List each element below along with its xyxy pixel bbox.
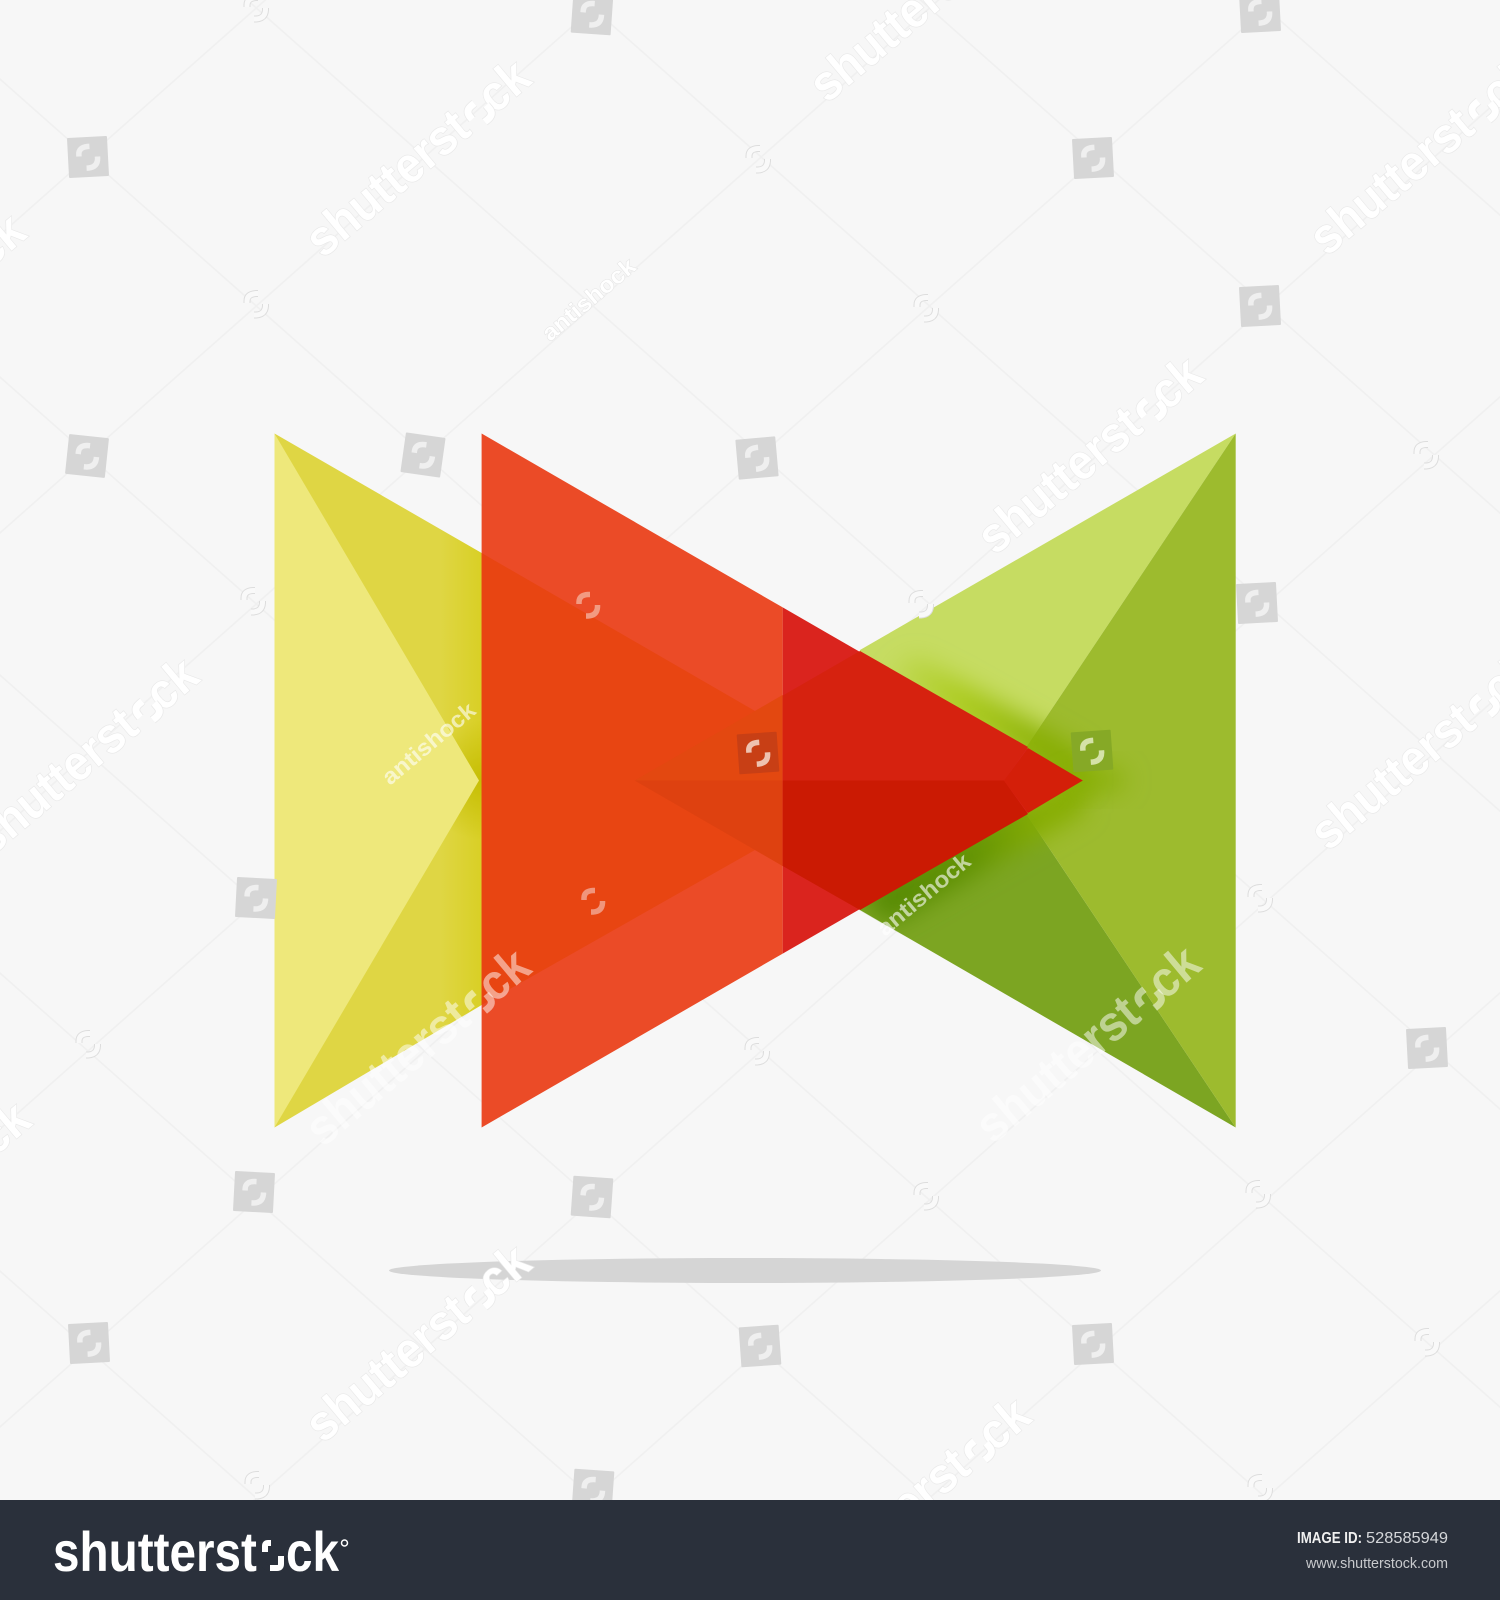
red over yellow (482, 553, 783, 1005)
green bottom facet (860, 780, 1236, 1128)
red centre lower overlap (635, 780, 783, 866)
green shadow under red (860, 655, 1127, 925)
red tip upper (783, 651, 1028, 780)
watermarks: shutterstock: shutterstock (294, 937, 541, 1156)
red tip point (1004, 748, 1083, 813)
watermarks: antishock (377, 253, 976, 941)
image id: IMAGE ID: (1297, 1530, 1362, 1547)
red tip lower (783, 780, 1028, 910)
triangle: green (860, 434, 1236, 1128)
watermarks: shutterstock: shutterstock (964, 934, 1211, 1153)
watermarks: shutterstock: shutterstock (294, 48, 541, 267)
yellow dark facets (274, 434, 482, 1128)
yellow edge shading (440, 529, 482, 1030)
green right facet (1004, 434, 1236, 1128)
watermarks: shutterstock: shutterstock (294, 1233, 541, 1452)
triangle: yellow (274, 434, 542, 1128)
red tip wedge (783, 607, 1083, 954)
floor shadow (389, 1258, 1101, 1283)
watermarks: antishock: antishock (537, 253, 641, 346)
watermarks: antishock: antishock (377, 697, 481, 790)
watermark icon on green (1071, 730, 1113, 772)
yellow light facet (274, 434, 479, 1128)
green top facet (860, 434, 1236, 780)
red centre upper overlap (635, 695, 783, 780)
footer logo: shutterstock (53, 1520, 340, 1583)
yellow core shading (422, 720, 542, 840)
footer bar (0, 1500, 1500, 1600)
tip shadow (1077, 762, 1128, 802)
website: www.shutterstock.com (1305, 1555, 1448, 1572)
watermarks: antishock: antishock (872, 848, 976, 941)
upper shadow (895, 653, 1083, 774)
lower shadow (860, 770, 1085, 925)
triangle: red (482, 434, 1083, 1128)
image id: 528585949 (1366, 1530, 1448, 1547)
red body (482, 434, 783, 1128)
watermarks: shutterstock: shutterstock (966, 345, 1213, 564)
watermarks: shutterstock: shutterstock (794, 1386, 1041, 1600)
watermark icon on red (737, 732, 779, 774)
